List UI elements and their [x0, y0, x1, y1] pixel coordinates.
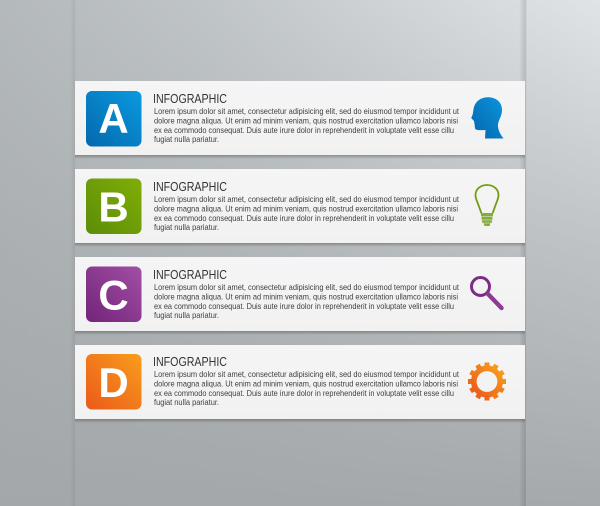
banner B	[75, 169, 525, 247]
icon: gear	[468, 362, 506, 400]
text block A: dolore magna aliqua. Ut enim ad minim veniam, quis nostrud exercitation ullamco laboris nisi	[154, 115, 458, 125]
heading B: INFOGRAPHIC	[153, 179, 227, 194]
banner C strip	[75, 257, 525, 331]
text block B: dolore magna aliqua. Ut enim ad minim veniam, quis nostrud exercitation ullamco laboris nisi	[154, 203, 458, 213]
text block A	[154, 106, 459, 144]
text block B: fugiat nulla pariatur.	[154, 222, 219, 232]
text block B: ex ea commodo consequat. Duis aute irure dolor in reprehenderit in voluptate velit esse cillu	[154, 213, 454, 223]
text block D: fugiat nulla pariatur.	[154, 397, 219, 407]
banner A	[75, 81, 525, 159]
text block D	[154, 369, 459, 407]
badge A	[86, 91, 142, 146]
badge C: C	[98, 272, 129, 318]
heading C: INFOGRAPHIC	[153, 267, 227, 282]
text block B	[154, 194, 459, 232]
badge B	[86, 178, 142, 234]
banner D	[75, 345, 525, 423]
text block D: Lorem ipsum dolor sit amet, consectetur adipisicing elit, sed do eiusmod tempor incididunt ut	[154, 369, 459, 379]
icon: light bulb	[476, 185, 498, 226]
text block D: ex ea commodo consequat. Duis aute irure dolor in reprehenderit in voluptate velit esse cillu	[154, 388, 454, 398]
text block D: dolore magna aliqua. Ut enim ad minim veniam, quis nostrud exercitation ullamco laboris nisi	[154, 378, 458, 388]
banner C	[75, 257, 525, 335]
text block A: fugiat nulla pariatur.	[154, 134, 219, 144]
text block A: ex ea commodo consequat. Duis aute irure dolor in reprehenderit in voluptate velit esse cillu	[154, 125, 454, 135]
text block C: Lorem ipsum dolor sit amet, consectetur adipisicing elit, sed do eiusmod tempor incididunt ut	[154, 282, 459, 292]
text block C: fugiat nulla pariatur.	[154, 310, 219, 320]
icon: head	[471, 97, 504, 138]
badge A: A	[98, 95, 129, 142]
text block C: ex ea commodo consequat. Duis aute irure dolor in reprehenderit in voluptate velit esse cillu	[154, 301, 454, 311]
badge B: B	[98, 184, 129, 230]
heading D: INFOGRAPHIC	[153, 354, 227, 369]
banner B strip	[75, 169, 525, 243]
text block B: Lorem ipsum dolor sit amet, consectetur adipisicing elit, sed do eiusmod tempor incididunt ut	[154, 194, 459, 204]
icon: magnifying glass	[472, 278, 502, 308]
badge C	[86, 266, 142, 322]
text block A: Lorem ipsum dolor sit amet, consectetur adipisicing elit, sed do eiusmod tempor incididunt ut	[154, 106, 459, 116]
badge D: D	[98, 359, 129, 406]
banner D strip	[75, 345, 525, 419]
heading A: INFOGRAPHIC	[153, 91, 227, 106]
text block C: dolore magna aliqua. Ut enim ad minim veniam, quis nostrud exercitation ullamco laboris nisi	[154, 291, 458, 301]
banner A strip	[75, 81, 525, 155]
badge D	[86, 354, 142, 410]
text block C	[154, 282, 459, 320]
